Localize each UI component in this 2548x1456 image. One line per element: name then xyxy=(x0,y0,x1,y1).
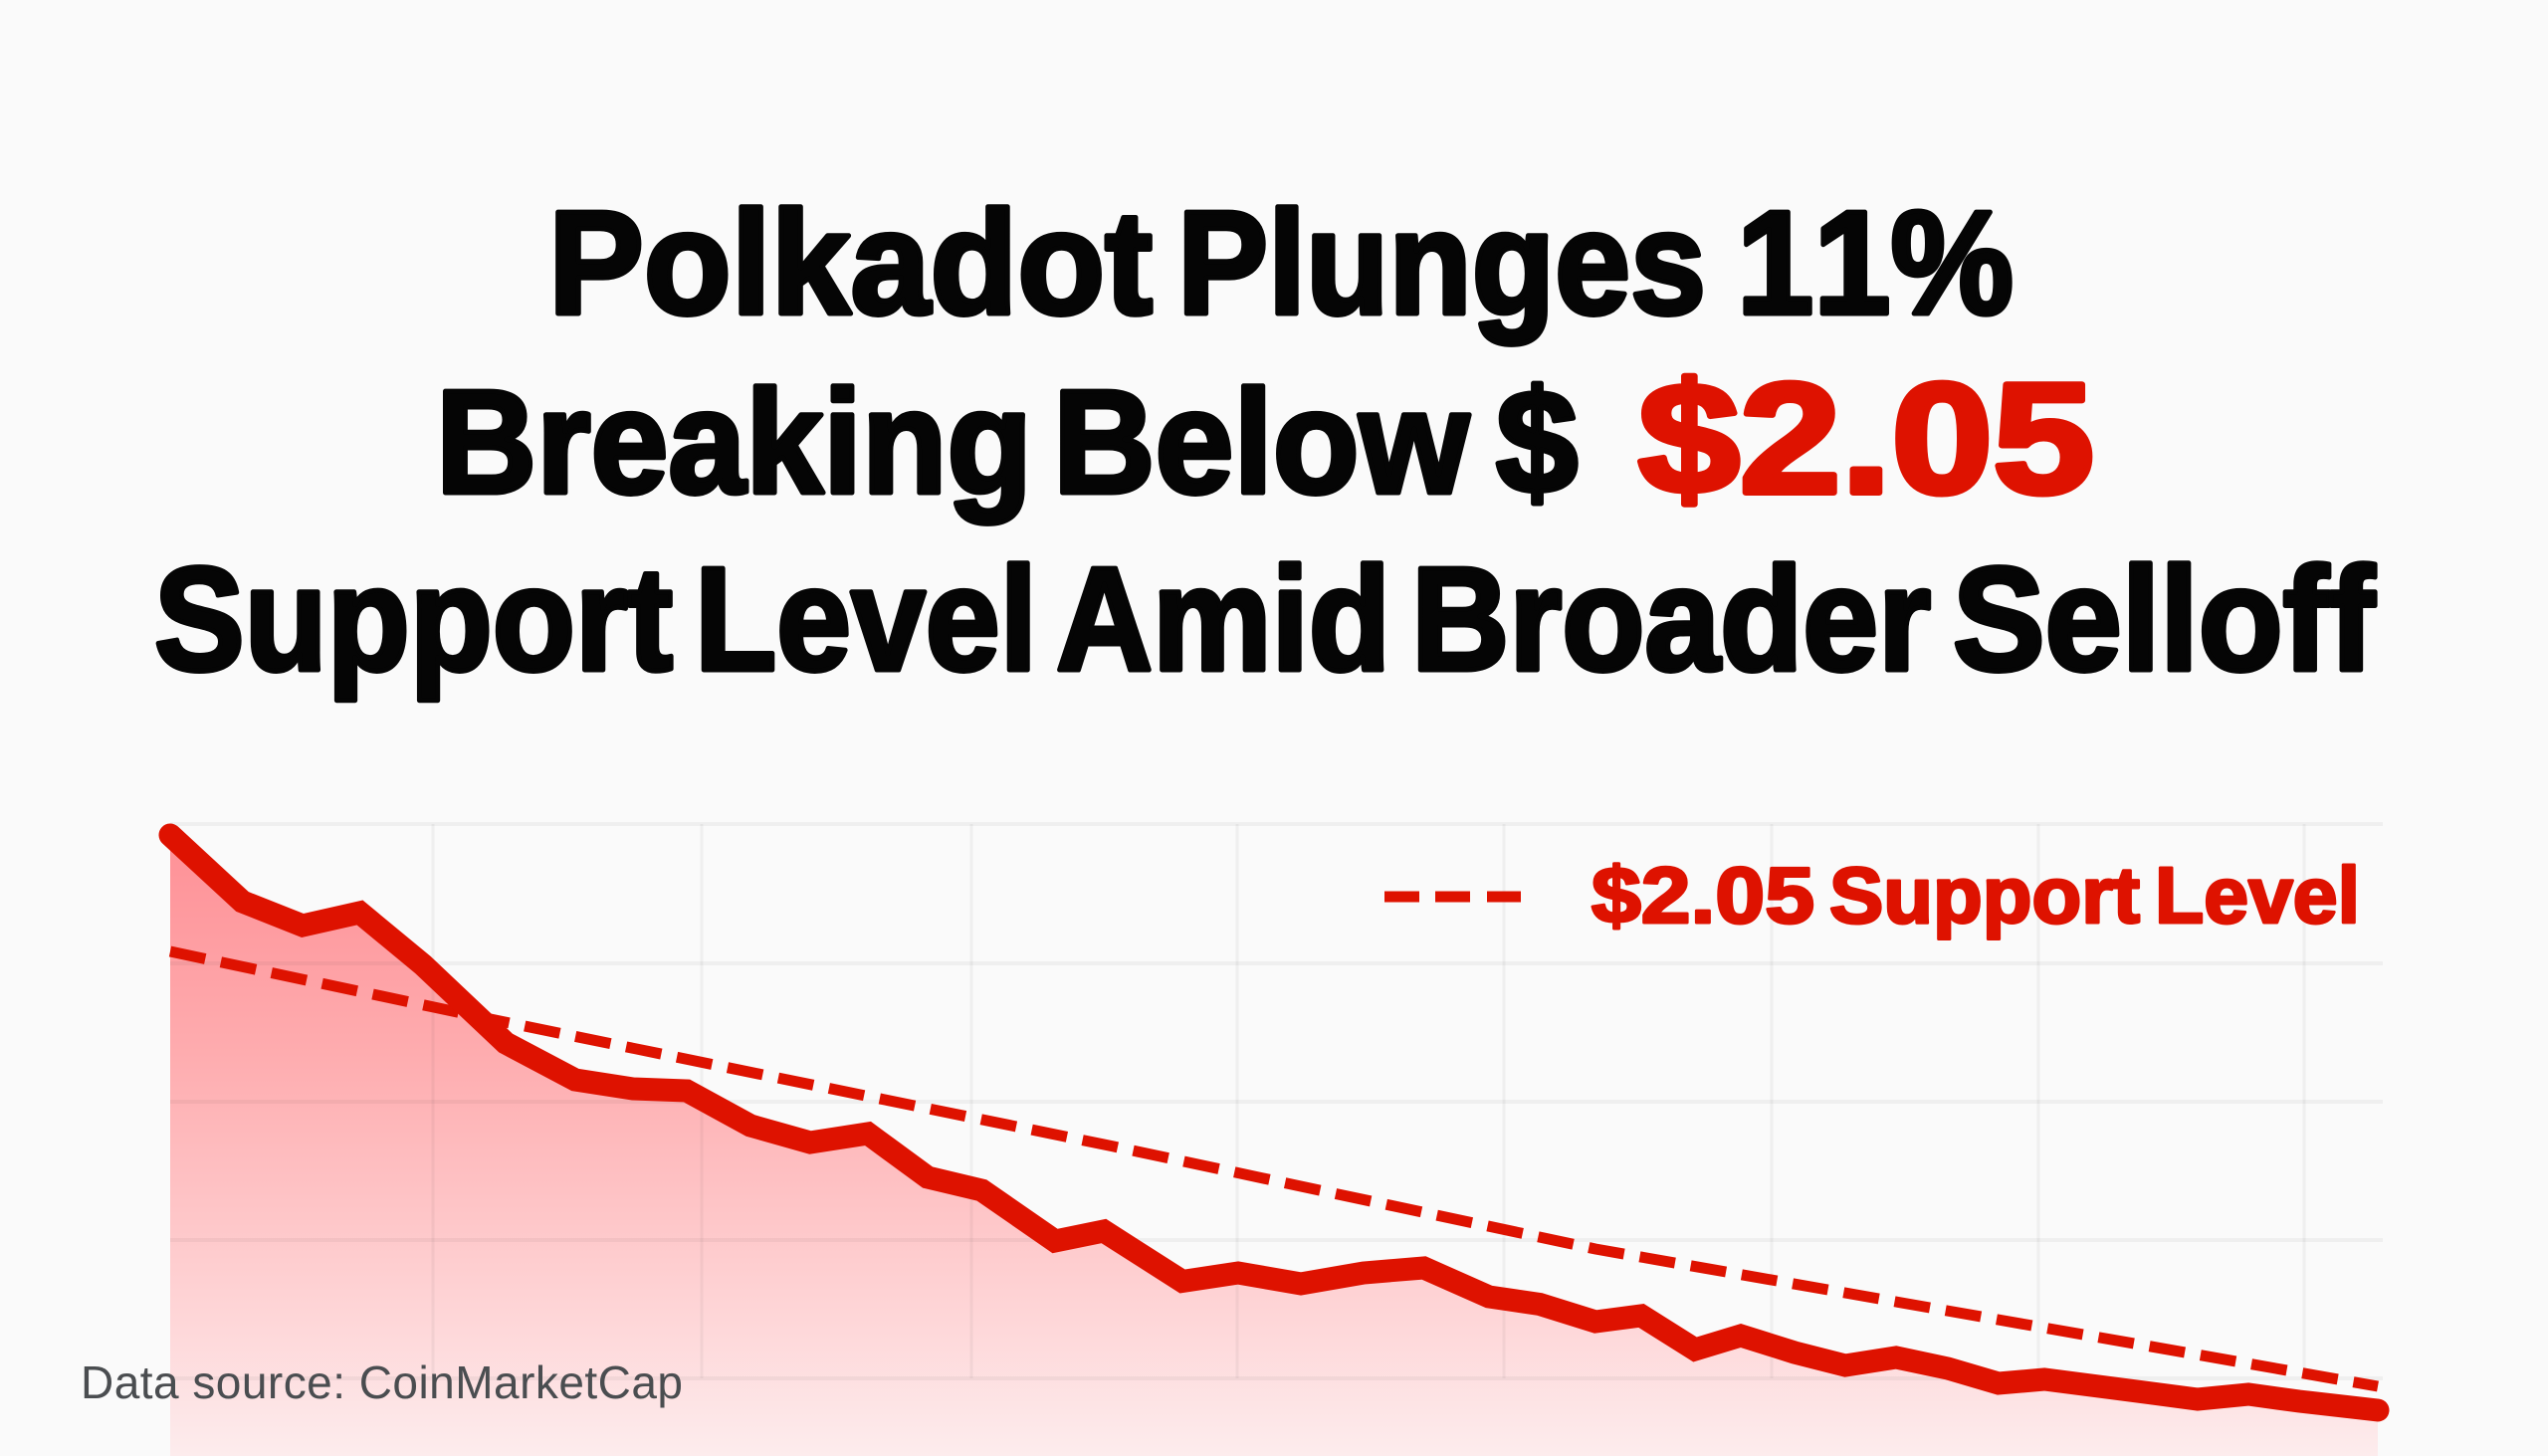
legend dashes xyxy=(1384,892,1521,902)
title line 3: Broader xyxy=(1411,537,1931,702)
legend label: Support xyxy=(1829,851,2140,939)
highlighted price: $2.05 xyxy=(1638,351,2094,526)
title line 1: Plunges xyxy=(1177,181,1706,345)
title line 2: Below xyxy=(1053,360,1470,524)
title line 3: Amid xyxy=(1056,537,1390,702)
legend label: Level xyxy=(2155,851,2360,939)
title line 1: Polkadot xyxy=(548,181,1153,345)
title line 3: Level xyxy=(695,537,1037,702)
area fill under price line xyxy=(170,835,2378,1456)
title xyxy=(154,181,2376,702)
title line 2: Breaking xyxy=(436,360,1032,524)
chart grid xyxy=(170,824,2383,1378)
title line 3: Selloff xyxy=(1953,537,2376,702)
support level dashed line xyxy=(170,951,2378,1386)
legend xyxy=(1384,851,2360,939)
price chart xyxy=(170,824,2383,1456)
title line 1: 11% xyxy=(1737,181,2014,345)
legend label: $2.05 xyxy=(1592,851,1814,939)
title line 3: Support xyxy=(154,537,673,702)
data source note: Data source: CoinMarketCap xyxy=(81,1356,683,1408)
price line xyxy=(170,835,2378,1410)
title line 2: $ xyxy=(1496,360,1578,524)
